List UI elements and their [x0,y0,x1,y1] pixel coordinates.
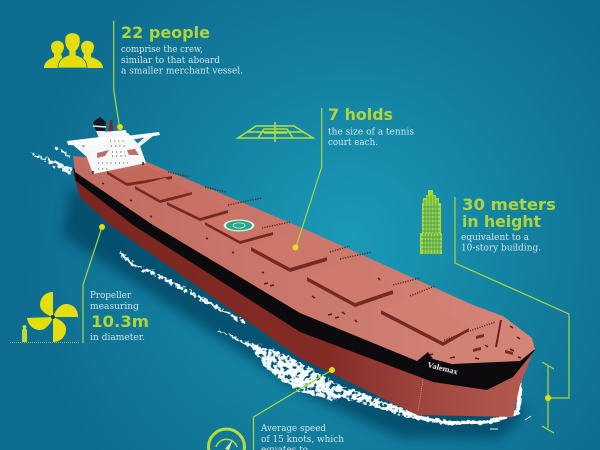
heading [462,195,556,231]
callout: height [420,190,569,433]
icon: skyscraper [420,190,442,254]
body text top: measuring [90,302,139,312]
heading: 30 meters [462,195,556,214]
dot [329,367,335,373]
deck [73,156,535,364]
callout: propeller [10,224,149,343]
body text [461,233,541,254]
ground line [10,342,80,344]
body text: 10-story building. [461,244,541,254]
body text: court each. [328,138,378,148]
figure: 10.3m [91,312,149,331]
icon: three people [44,33,103,68]
body text: of 15 knots, which [261,435,344,445]
ship hull [73,173,534,417]
leader line [254,370,332,450]
ship name: Valemax [427,360,459,376]
icon: tennis court [238,122,313,142]
body text top [90,291,139,312]
black hull band [73,168,535,390]
ship shadow on water [62,185,530,438]
body text: comprise the crew, [121,45,203,55]
ship [67,117,535,417]
dot [99,224,105,230]
callout: holds [238,105,414,250]
body text [328,128,414,148]
heading: in height [462,212,541,231]
leader line [296,108,322,247]
body text: similar to that aboard [121,56,220,66]
body text [121,45,243,76]
body text: a smaller merchant vessel. [121,66,243,76]
deck fittings [102,172,521,359]
bridge [83,133,146,174]
body text bottom: in diameter. [90,333,145,343]
helipad [224,220,254,232]
leader line [455,197,569,398]
dot [292,244,298,250]
body text: equivalent to a [461,233,530,243]
body text [260,424,344,450]
icon: person for scale [22,325,27,342]
funnel [93,117,106,131]
heading: 22 people [121,23,210,42]
cargo holds [107,167,469,346]
dot [117,124,123,130]
draught mark [418,380,423,411]
dot [545,395,551,401]
body text: the size of a tennis [328,128,414,138]
superstructure [67,117,160,174]
leader line [114,21,120,127]
leader line [83,227,102,343]
stern wake [30,147,72,172]
heading: 7 holds [328,105,393,124]
callout: speed [208,367,344,450]
body text: Average speed [260,424,326,434]
side wake [120,253,531,429]
mast [108,120,114,135]
icon: speedometer [208,429,244,450]
callout: crew [44,21,243,130]
icon: propeller [27,292,78,342]
body text top: Propeller [90,291,132,301]
height bracket [542,362,554,433]
